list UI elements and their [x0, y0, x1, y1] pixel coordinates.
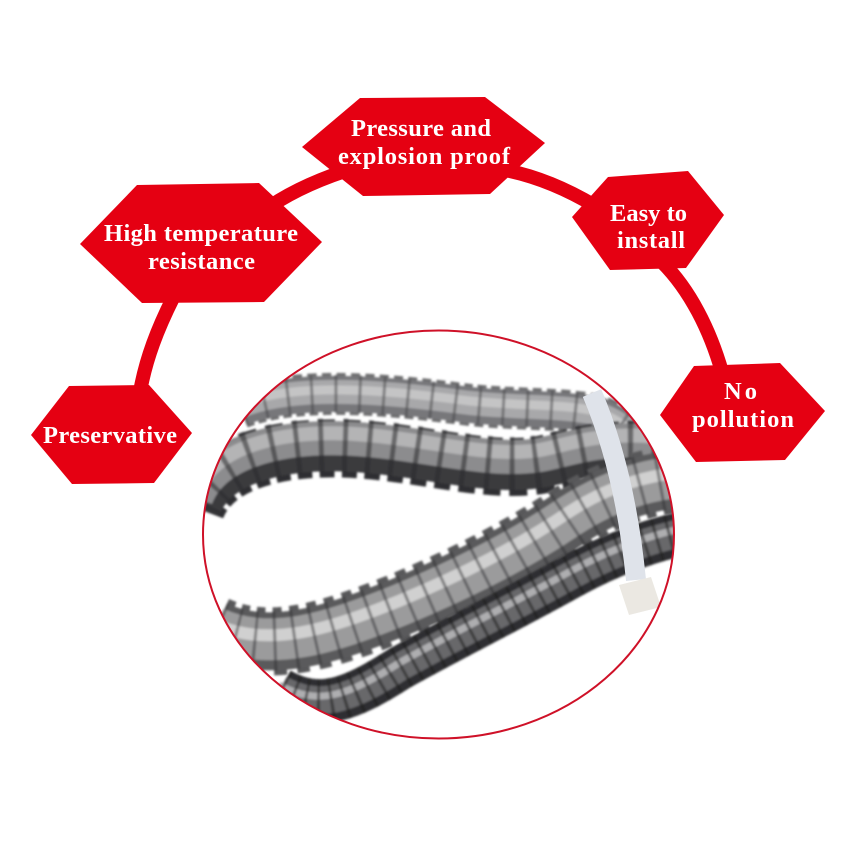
infographic canvas [31, 97, 825, 740]
hexagon: pressure and explosion proof: explosion proof [338, 143, 511, 170]
hexagon: easy to install [572, 171, 724, 270]
hexagon: high temperature resistance [80, 183, 322, 303]
hexagon: preservative [31, 385, 192, 484]
hexagon: no pollution: No [724, 378, 757, 405]
hexagon: no pollution: pollution [692, 406, 794, 433]
hexagon: pressure and explosion proof [302, 97, 545, 196]
hexagon: pressure and explosion proof: Pressure and [351, 115, 491, 142]
hose: top rear [244, 371, 634, 432]
hexagon: no pollution [660, 363, 825, 462]
photo: bundled metal hoses in oval frame [196, 330, 690, 738]
hose: large front [214, 472, 690, 641]
hexagon: preservative: Preservative [43, 422, 177, 449]
hexagon: easy to install: install [617, 227, 685, 254]
hexagon: easy to install: Easy to [610, 200, 687, 227]
hose: thin lower [279, 527, 690, 701]
hexagon: high temperature resistance: High temperature [104, 220, 298, 247]
connecting arc [140, 170, 722, 392]
hexagon: high temperature resistance: resistance [148, 248, 255, 275]
cable tie [592, 393, 661, 615]
hose: upper front [196, 433, 680, 508]
